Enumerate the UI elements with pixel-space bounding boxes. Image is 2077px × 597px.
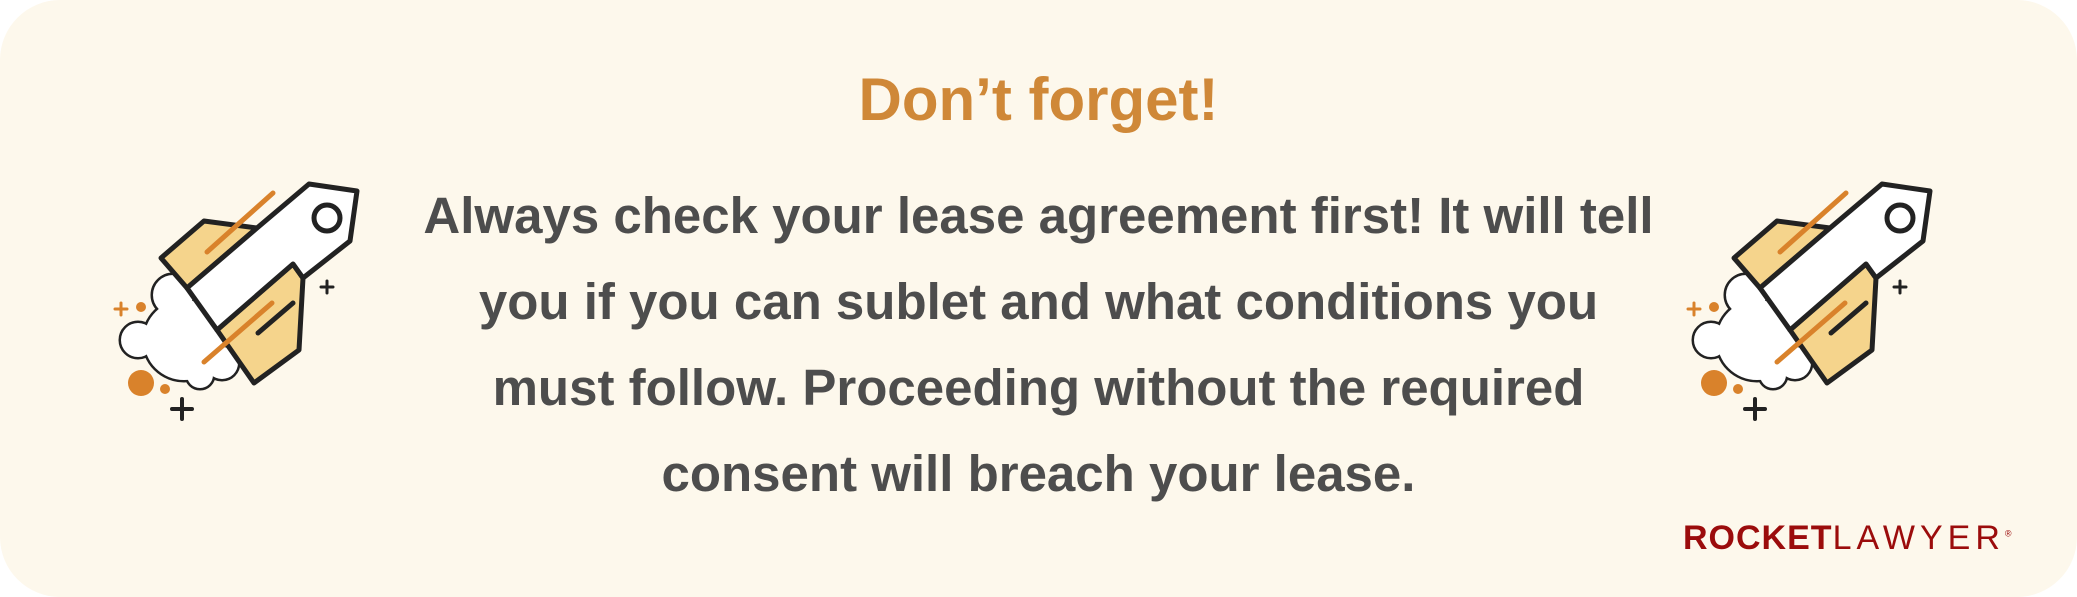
text block: body [423,187,1654,502]
icon: rocket right [1686,182,1932,421]
text block: body: you if you can sublet and what conditions you [479,273,1598,330]
text block: body: consent will breach your lease. [662,445,1415,502]
logo: ROCKETLAWYER® [1683,519,2013,557]
icon: rocket left [114,182,360,421]
title: Don’t forget! [859,66,1218,133]
text block: body: must follow. Proceeding without the required [493,359,1584,416]
text block: body: Always check your lease agreement first! It will tell [423,187,1654,244]
